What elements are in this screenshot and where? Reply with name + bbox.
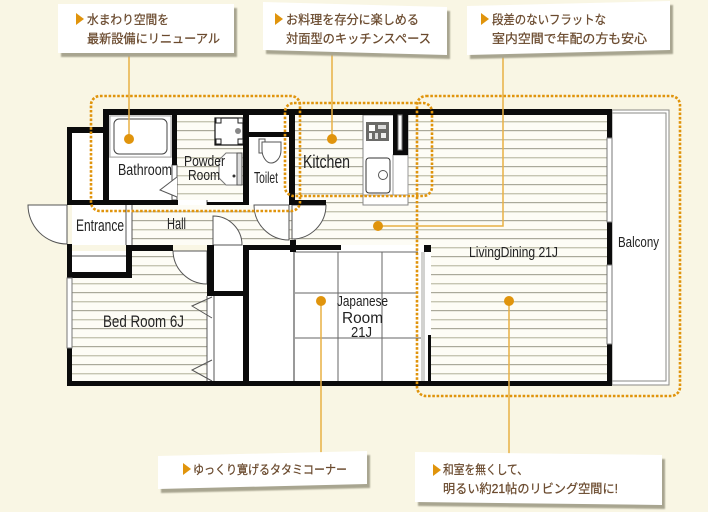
room labels: LivingDining 21J — [469, 244, 558, 261]
kitchen counter — [363, 115, 408, 205]
closets — [72, 205, 293, 381]
leader: kitchen — [327, 53, 337, 144]
room labels: Powder — [184, 153, 225, 170]
floor base — [72, 115, 607, 381]
callout: water area — [58, 4, 237, 57]
highlight: water area — [91, 96, 300, 211]
callout: living room: 明るい約21帖のリビング空間に! — [443, 481, 618, 496]
callout: water area: 水まわり空間を — [87, 13, 169, 27]
walls — [67, 109, 612, 386]
doors — [28, 165, 326, 381]
leader: flat interior — [373, 53, 503, 231]
room labels: Kitchen — [303, 152, 350, 172]
room labels: Balcony — [618, 234, 659, 251]
callout: living room — [415, 452, 665, 509]
room labels: Hall — [167, 216, 186, 233]
callout: kitchen: 対面型のキッチンスペース — [286, 32, 431, 46]
leader: bathroom — [124, 53, 134, 144]
striped floors — [72, 115, 607, 381]
room labels: Bathroom — [118, 162, 172, 179]
room labels: Japanese — [337, 293, 388, 310]
room labels: Toilet — [254, 170, 278, 187]
powder room fixtures — [215, 118, 243, 185]
room labels: 21J — [351, 324, 372, 341]
windows — [67, 115, 612, 348]
leader: tatami corner — [316, 296, 326, 456]
callout: kitchen: お料理を存分に楽しめる — [286, 12, 419, 27]
floor plan — [28, 109, 669, 386]
leader: living room — [504, 296, 514, 455]
balcony — [612, 110, 669, 385]
callout: water area: 最新設備にリニューアル — [87, 32, 220, 46]
interior thin lines — [28, 200, 295, 381]
callout: flat interior: 室内空間で年配の方も安心 — [492, 31, 648, 46]
callout: tatami corner: ゆっくり寛げるタタミコーナー — [193, 463, 347, 477]
room labels: Room — [188, 167, 220, 184]
callout: living room: 和室を無くして、 — [443, 462, 528, 477]
bathroom fixture: bathtub — [109, 115, 172, 200]
toilet fixture — [259, 139, 281, 163]
callout: flat interior — [467, 1, 673, 59]
japanese room — [293, 252, 425, 381]
room labels: Bed Room 6J — [103, 312, 184, 331]
room labels: Room — [342, 310, 383, 327]
room labels: Entrance — [76, 216, 124, 235]
toilet room fill — [249, 115, 289, 132]
highlight: living area — [417, 96, 680, 396]
callout: kitchen — [263, 2, 450, 59]
highlight: kitchen area — [285, 103, 432, 196]
room labels — [76, 152, 659, 341]
callout: tatami corner — [158, 451, 370, 493]
callout: flat interior: 段差のないフラットな — [492, 12, 606, 27]
